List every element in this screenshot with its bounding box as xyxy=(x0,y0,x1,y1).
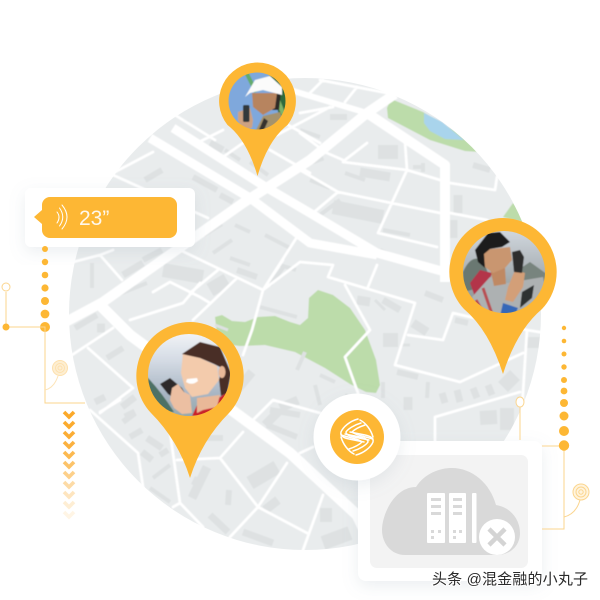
voice duration: 23” xyxy=(79,207,109,230)
photo xyxy=(228,72,286,130)
icon: cloud xyxy=(382,468,520,555)
map circle xyxy=(60,70,550,560)
orange voice bubble xyxy=(34,197,177,238)
pin: worker in helmet xyxy=(219,62,296,176)
lake xyxy=(424,113,464,140)
card: cloud server xyxy=(358,441,542,581)
photo xyxy=(463,231,545,313)
main roads xyxy=(60,90,445,552)
right edge park xyxy=(503,203,522,222)
right dots xyxy=(559,326,569,451)
logo badge xyxy=(314,394,400,480)
left dots xyxy=(40,246,50,332)
right connector lines xyxy=(516,397,589,529)
city blocks xyxy=(75,117,533,543)
bubble card xyxy=(25,188,195,247)
inner panel xyxy=(370,455,528,568)
pin: man with backpack xyxy=(449,218,557,374)
icon: swirl logo xyxy=(341,419,373,455)
icon: error badge xyxy=(479,519,515,555)
central green park xyxy=(215,290,380,393)
watermark: 头条 @混金融的小丸子 xyxy=(432,571,588,588)
icon: server racks xyxy=(427,493,476,543)
icon: sound waves xyxy=(57,205,67,229)
photo xyxy=(148,334,230,416)
minor roads xyxy=(72,80,545,550)
top right park xyxy=(387,99,480,152)
left connector lines xyxy=(2,283,85,403)
pin: woman with radio xyxy=(136,322,244,478)
chevron arrows xyxy=(64,412,74,517)
